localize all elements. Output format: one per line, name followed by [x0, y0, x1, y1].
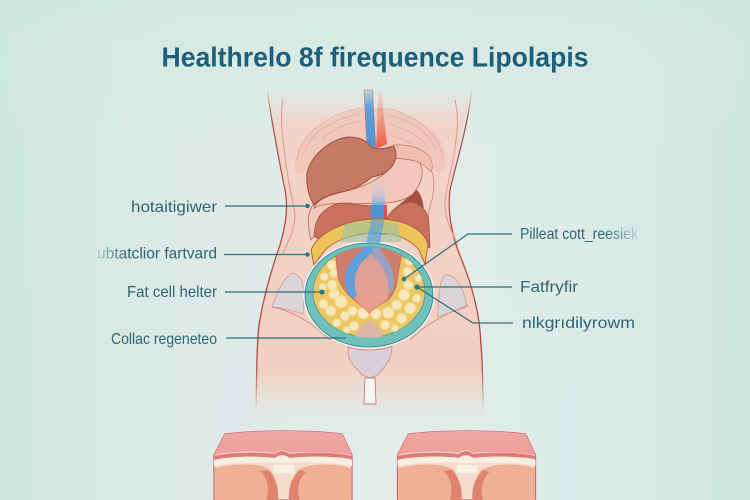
inner body contours: [282, 100, 458, 255]
torso illustration: [254, 88, 484, 418]
tissue panel left: [214, 431, 352, 500]
crescent right: [472, 470, 490, 500]
colour glow at band: [340, 221, 402, 242]
top skin layer: [214, 431, 352, 455]
center cell: [273, 465, 294, 473]
pale layer: [214, 456, 352, 466]
torso outline right: [449, 88, 483, 412]
lower leg gap: [364, 378, 376, 404]
blue glow at band: [366, 220, 384, 244]
intestine right: [387, 202, 430, 248]
label: nlkgridilyrowm: nlkgrıdilyrowm: [522, 315, 635, 332]
inner pink organ: [351, 252, 389, 313]
dark dermis band: [214, 451, 352, 460]
lobe right: [289, 464, 351, 500]
intestine left: [314, 203, 372, 240]
lobe left: [215, 464, 278, 500]
yellow fat layer: [313, 247, 425, 337]
bladder: [348, 346, 392, 378]
ureter right: [372, 247, 394, 294]
fat cell cross-section: [304, 220, 434, 348]
stomach: [314, 158, 422, 208]
yellow band: [311, 219, 428, 265]
fat cells: [319, 258, 422, 334]
lobe right: [472, 464, 534, 500]
dark organ behind stomach: [395, 190, 424, 215]
vein: [364, 90, 376, 150]
light band under liver: [308, 190, 350, 240]
side organ contours: [428, 172, 434, 220]
label: hotaitigiwer: hotaitigiwer: [131, 199, 218, 216]
label: Collac regeneteo: Collac regeneteo: [111, 331, 217, 348]
upper stomach band: [394, 145, 432, 172]
label: Pilleat cott reesiek: Pilleat cott_reesiek: [520, 226, 639, 243]
central vessel: [371, 205, 384, 235]
label: ubtatclior fartvard: ubtatclior fartvard: [97, 246, 217, 262]
label: Fatfryfir: Fatfryfir: [520, 279, 579, 296]
central pelvic organ: [335, 247, 402, 314]
ureter left: [345, 247, 378, 298]
title: Healthrelo 8f firequence Lipolapis: [162, 42, 588, 72]
lobe left: [398, 464, 462, 500]
top skin layer: [398, 431, 536, 455]
pale layer: [398, 456, 536, 466]
label: Fat cell helter: Fat cell helter: [127, 284, 218, 301]
torso silhouette: [254, 88, 484, 418]
artery: [376, 92, 387, 149]
white outer ring: [304, 242, 434, 348]
haze over stomach: [372, 178, 385, 205]
crescent left: [260, 470, 278, 500]
liver: [307, 137, 396, 205]
groin lines: [272, 305, 468, 340]
left callout lines: [224, 204, 346, 338]
teal ring: [305, 243, 433, 347]
right callout lines: [402, 234, 513, 323]
crescent right: [289, 470, 306, 500]
rib cage: [295, 108, 445, 175]
lower blob: [355, 320, 383, 338]
crescent left: [444, 470, 462, 500]
center cell: [456, 465, 478, 473]
torso outline left: [256, 88, 287, 412]
dark dermis band: [398, 451, 536, 460]
rib arcs: [297, 108, 443, 160]
tissue panel right: [398, 431, 536, 500]
side hip shapes: [272, 273, 304, 314]
